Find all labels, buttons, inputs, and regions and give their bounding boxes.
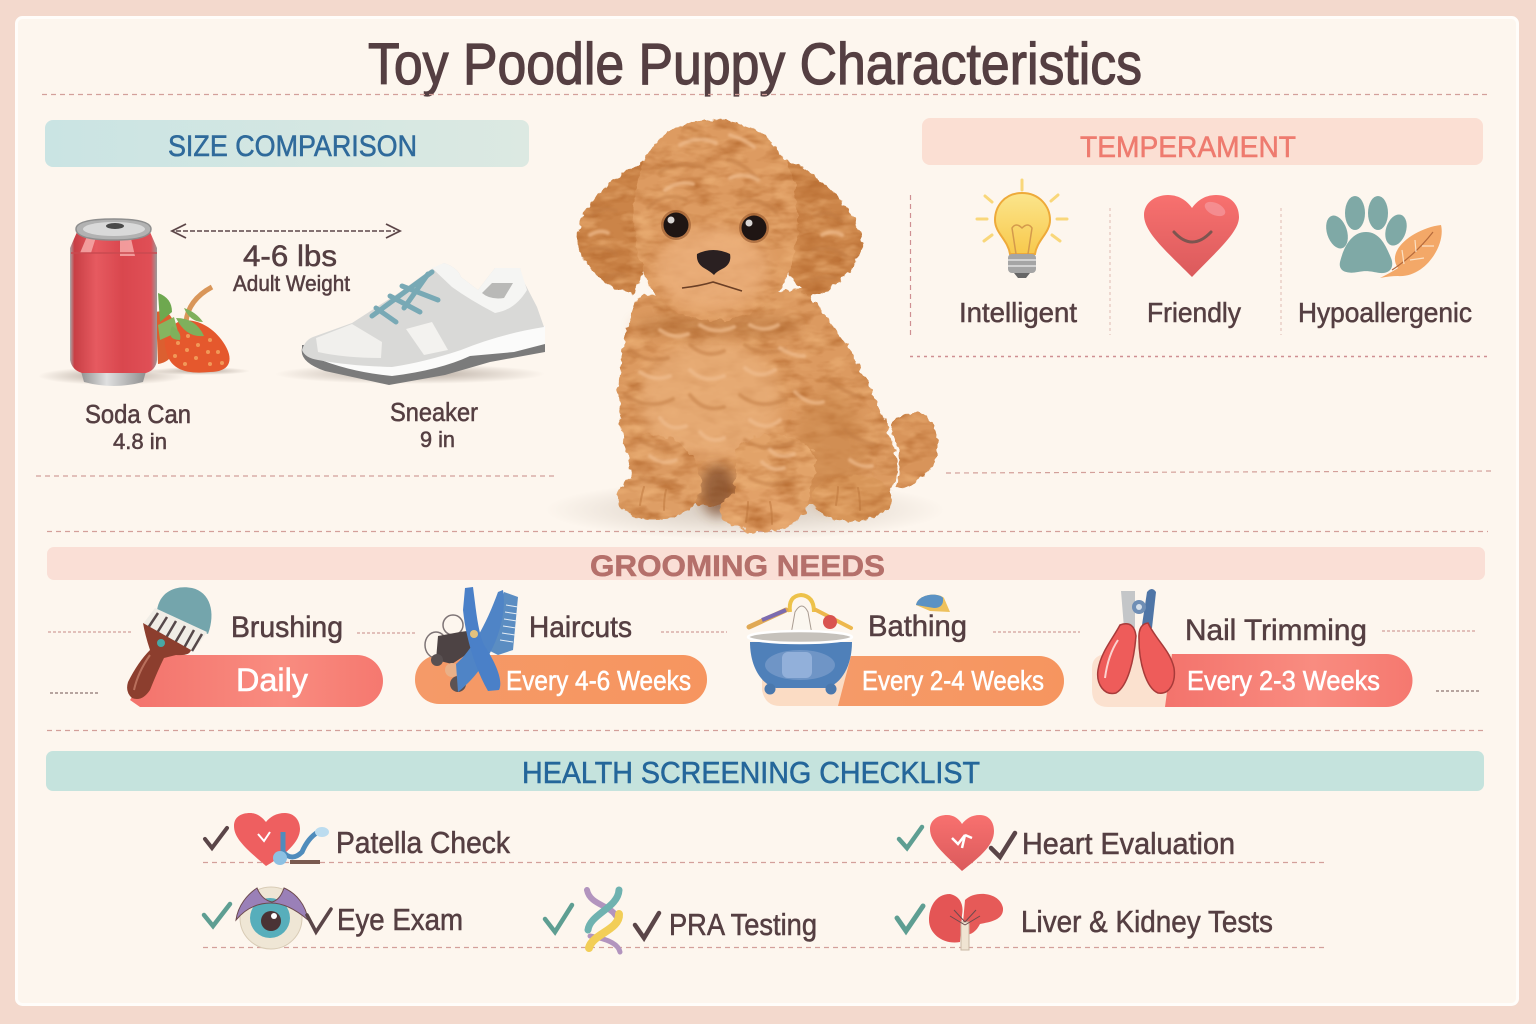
pill: every 2-4 weeks (762, 656, 1064, 706)
panel: temperament (922, 118, 1483, 328)
labels: temperament traits: Friendly (1147, 297, 1241, 328)
item: bathing: Every 2-4 Weeks (862, 665, 1044, 696)
icon: paw and leaf (1322, 196, 1442, 278)
item: nail trimming (1092, 589, 1412, 707)
panel: size comparison (38, 120, 545, 454)
puppy body shading (640, 340, 864, 516)
pill: daily (130, 655, 383, 707)
heading: grooming needs (47, 547, 1485, 583)
item: pra testing (545, 890, 817, 952)
item: brushing: Brushing (231, 611, 343, 644)
item: patella check: Patella Check (336, 825, 510, 860)
item: haircuts (415, 587, 707, 704)
icon: light bulb (977, 180, 1067, 278)
puppy muzzle (656, 226, 768, 310)
icon: soda can (38, 219, 186, 386)
icon: scissors and comb (425, 587, 518, 692)
puppy body (618, 290, 897, 505)
labels: temperament traits: Hypoallergenic (1298, 297, 1472, 328)
puppy nose and mouth (682, 250, 742, 291)
icon: strawberries (150, 287, 250, 375)
puppy eyes (661, 210, 769, 243)
item: liver and kidney tests (897, 894, 1273, 950)
icon: smiling heart (1144, 195, 1239, 277)
title: Toy Poodle Puppy Characteristics (368, 32, 1142, 97)
item: patella check (205, 813, 510, 866)
weight label (233, 240, 350, 296)
pill: every 4-6 weeks (415, 655, 707, 704)
item: liver and kidney tests: Liver & Kidney Tests (1021, 904, 1273, 939)
heading: temperament: TEMPERAMENT (1080, 131, 1296, 164)
heading: health screening (46, 751, 1484, 791)
icon: shower cap (916, 595, 950, 612)
heading: grooming needs: GROOMING NEEDS (590, 550, 885, 583)
item: haircuts: Every 4-6 Weeks (506, 665, 691, 696)
icon: sneaker (275, 263, 545, 385)
item: heart evaluation (899, 815, 1235, 871)
heading: health screening: HEALTH SCREENING CHECKLIST (522, 755, 980, 790)
panel: health screening checklist (46, 751, 1484, 952)
label: soda can (85, 399, 191, 454)
icon: brush (127, 587, 211, 699)
heading: temperament (922, 118, 1483, 165)
puppy neck shadow (632, 314, 800, 338)
item: eye exam (204, 887, 463, 949)
arrow: weight span (172, 224, 400, 238)
item: brushing (127, 587, 383, 707)
panel: grooming needs (47, 547, 1485, 707)
labels: temperament traits (959, 297, 1472, 328)
heading: size comparison: SIZE COMPARISON (168, 130, 417, 163)
item: nail trimming: Nail Trimming (1185, 614, 1367, 647)
label: sneaker: 9 in (420, 427, 455, 452)
puppy front legs and paws (617, 434, 892, 532)
puppy tail (890, 412, 938, 490)
icon: bath tub (748, 595, 852, 694)
item: haircuts: Haircuts (529, 611, 632, 644)
label: sneaker (390, 397, 478, 452)
item: heart evaluation: Heart Evaluation (1022, 826, 1235, 861)
item: bathing (748, 595, 1064, 706)
weight label: Adult Weight (233, 271, 350, 296)
puppy head (634, 120, 798, 320)
heading: size comparison (45, 120, 529, 167)
item: pra testing: PRA Testing (669, 907, 817, 942)
item: bathing: Bathing (868, 610, 967, 643)
pill: every 2-3 weeks (1092, 640, 1412, 707)
illustration: toy poodle puppy (545, 120, 945, 540)
puppy ears (577, 160, 862, 296)
fur tufts (590, 135, 875, 484)
icon: nail clippers (1098, 589, 1174, 693)
label: sneaker: Sneaker (390, 397, 478, 427)
item: eye exam: Eye Exam (337, 902, 463, 937)
label: soda can: Soda Can (85, 399, 191, 429)
item: brushing: Daily (236, 662, 308, 698)
item: nail trimming: Every 2-3 Weeks (1187, 665, 1380, 696)
labels: temperament traits: Intelligent (959, 297, 1077, 328)
weight label: 4-6 lbs (243, 240, 337, 273)
label: soda can: 4.8 in (113, 429, 167, 454)
paw toe creases (640, 487, 860, 524)
